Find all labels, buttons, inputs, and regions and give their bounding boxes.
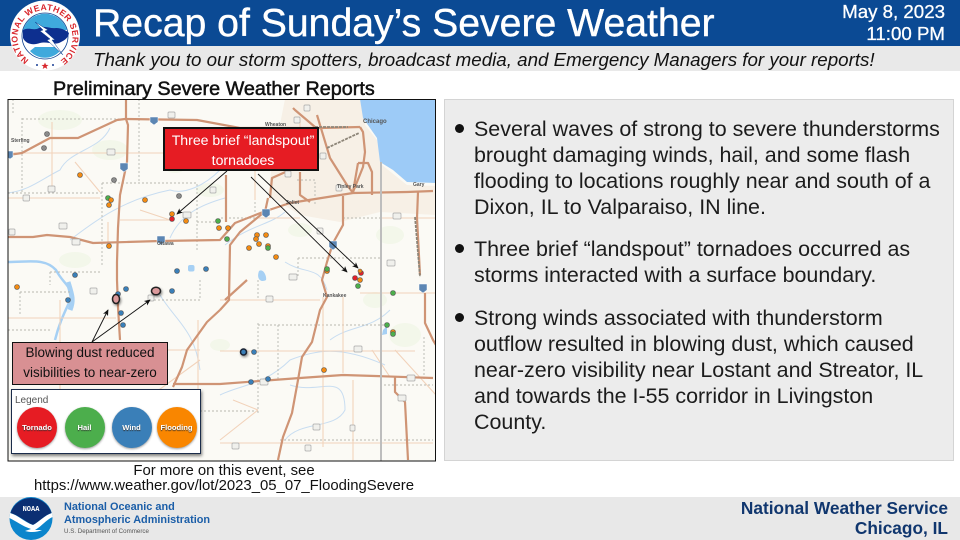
panel: severe weather report map xyxy=(8,99,436,462)
arrow: dust callout to east marker xyxy=(92,300,150,342)
title: Recap of Sunday’s Severe Weather xyxy=(93,2,715,45)
link text xyxy=(34,462,414,494)
panel: summary xyxy=(444,99,954,461)
legend: flooding: Flooding xyxy=(160,423,193,432)
bullet 3: outflow resulted in blowing dust, which caused xyxy=(474,332,914,356)
date and time: May 8, 2023 xyxy=(842,1,945,22)
map base xyxy=(7,95,436,462)
bullet 2: storms interacted with a surface boundary. xyxy=(474,263,876,287)
department: U.S. Department of Commerce xyxy=(64,528,149,535)
legend: hail xyxy=(64,407,104,448)
illinois river xyxy=(8,261,72,340)
state line and expressway xyxy=(380,162,382,461)
map heading: Preliminary Severe Weather Reports xyxy=(53,78,375,100)
callout: tornadoes: Three brief “landspout” xyxy=(172,132,314,148)
legend title: Legend xyxy=(15,395,48,406)
header band xyxy=(0,0,960,46)
county lines xyxy=(8,99,433,440)
icon: NWS logo: NATIONAL WEATHER SERVICE xyxy=(12,4,78,65)
bullet 2 xyxy=(455,237,910,287)
legend: tornado: Tornado xyxy=(22,423,52,432)
callout: blowing dust: Blowing dust reduced xyxy=(25,345,155,360)
legend: wind xyxy=(112,407,152,448)
hail reports xyxy=(106,196,396,328)
bullet 1: Dixon, IL to Valparaiso, IN line. xyxy=(474,195,766,219)
footer band xyxy=(0,497,960,540)
NOAA name: Atmospheric Administration xyxy=(64,514,210,526)
place labels: Wheaton xyxy=(265,122,286,128)
later hail reports xyxy=(266,246,396,336)
place labels: Ottawa xyxy=(157,241,174,247)
minor roads xyxy=(8,120,436,460)
green speckle xyxy=(38,110,421,351)
legend: flooding xyxy=(156,407,196,448)
callout: blowing dust: visibilities to near-zero xyxy=(23,365,157,380)
wind marker with dark ring xyxy=(240,349,246,355)
legend xyxy=(11,389,201,454)
bullet 3: Strong winds associated with thunderstorm xyxy=(474,306,883,330)
callout: blowing dust xyxy=(12,342,168,385)
arrow: dust callout to west marker xyxy=(92,310,108,342)
NOAA name xyxy=(64,501,210,526)
bullet 3: near-zero visibility near Lostant and Streator, IL xyxy=(474,358,923,382)
interstate roads xyxy=(8,95,436,460)
bullet 3 xyxy=(455,306,923,434)
place labels: Chicago xyxy=(363,119,387,125)
arrow: tornado callout to middle cluster xyxy=(251,177,347,272)
link text: https://www.weather.gov/lot/2023_05_07_FloodingSevere xyxy=(34,478,414,494)
NWS office xyxy=(741,498,948,538)
blowing dust markers xyxy=(112,287,160,304)
small lakes xyxy=(188,265,194,272)
callout: tornadoes xyxy=(163,127,319,171)
bullet 3: County. xyxy=(474,410,546,434)
lake michigan xyxy=(360,99,436,183)
subtitle band xyxy=(0,46,960,71)
place labels: Sterling xyxy=(11,138,30,144)
date and time xyxy=(842,1,945,44)
flooding reports xyxy=(14,172,396,372)
labelled expressways xyxy=(315,127,420,277)
icon: NOAA logo xyxy=(10,497,52,540)
wind reports xyxy=(66,266,270,384)
icon: NOAA logo: NOAA xyxy=(23,506,40,514)
report dots xyxy=(14,132,396,384)
urban area tint xyxy=(268,99,436,222)
NWS office: Chicago, IL xyxy=(855,518,948,538)
legend: tornado xyxy=(17,407,57,448)
subtitle: Thank you to our storm spotters, broadcast media, and Emergency Managers for your reports! xyxy=(93,49,875,70)
link text: For more on this event, see xyxy=(133,462,315,478)
arrow: tornado callout to right cluster xyxy=(258,174,358,268)
place labels: Kankakee xyxy=(323,293,347,299)
bullet 1: brought damaging winds, hail, and some flash xyxy=(474,143,910,167)
legend: hail: Hail xyxy=(78,423,91,432)
legend: wind: Wind xyxy=(122,423,141,432)
arrow: tornado callout to left cluster xyxy=(177,171,227,214)
map border xyxy=(8,100,436,461)
bullet 1: flooding to locations roughly near and south of a xyxy=(474,169,930,193)
NOAA name: National Oceanic and xyxy=(64,501,175,513)
other reports xyxy=(42,132,182,198)
date and time: 11:00 PM xyxy=(866,23,945,44)
NWS office: National Weather Service xyxy=(741,498,948,518)
tornado cluster flooding overlap xyxy=(358,269,362,273)
place labels: Joliet xyxy=(286,200,299,206)
interstate shields xyxy=(7,117,427,293)
place labels xyxy=(11,119,425,299)
highway shields xyxy=(9,105,415,451)
rivers xyxy=(8,128,390,440)
bullet 3: and towards the I-55 corridor in Livingston xyxy=(474,384,873,408)
place labels: Gary xyxy=(413,182,425,188)
tornado reports xyxy=(170,216,364,280)
bullet 1: Several waves of strong to severe thunderstorms xyxy=(474,117,940,141)
callout: tornadoes: tornadoes xyxy=(212,152,274,168)
bullet 1 xyxy=(455,117,940,219)
bullet 2: Three brief “landspout” tornadoes occurred as xyxy=(474,237,910,261)
place labels: Tinley Park xyxy=(337,184,364,190)
